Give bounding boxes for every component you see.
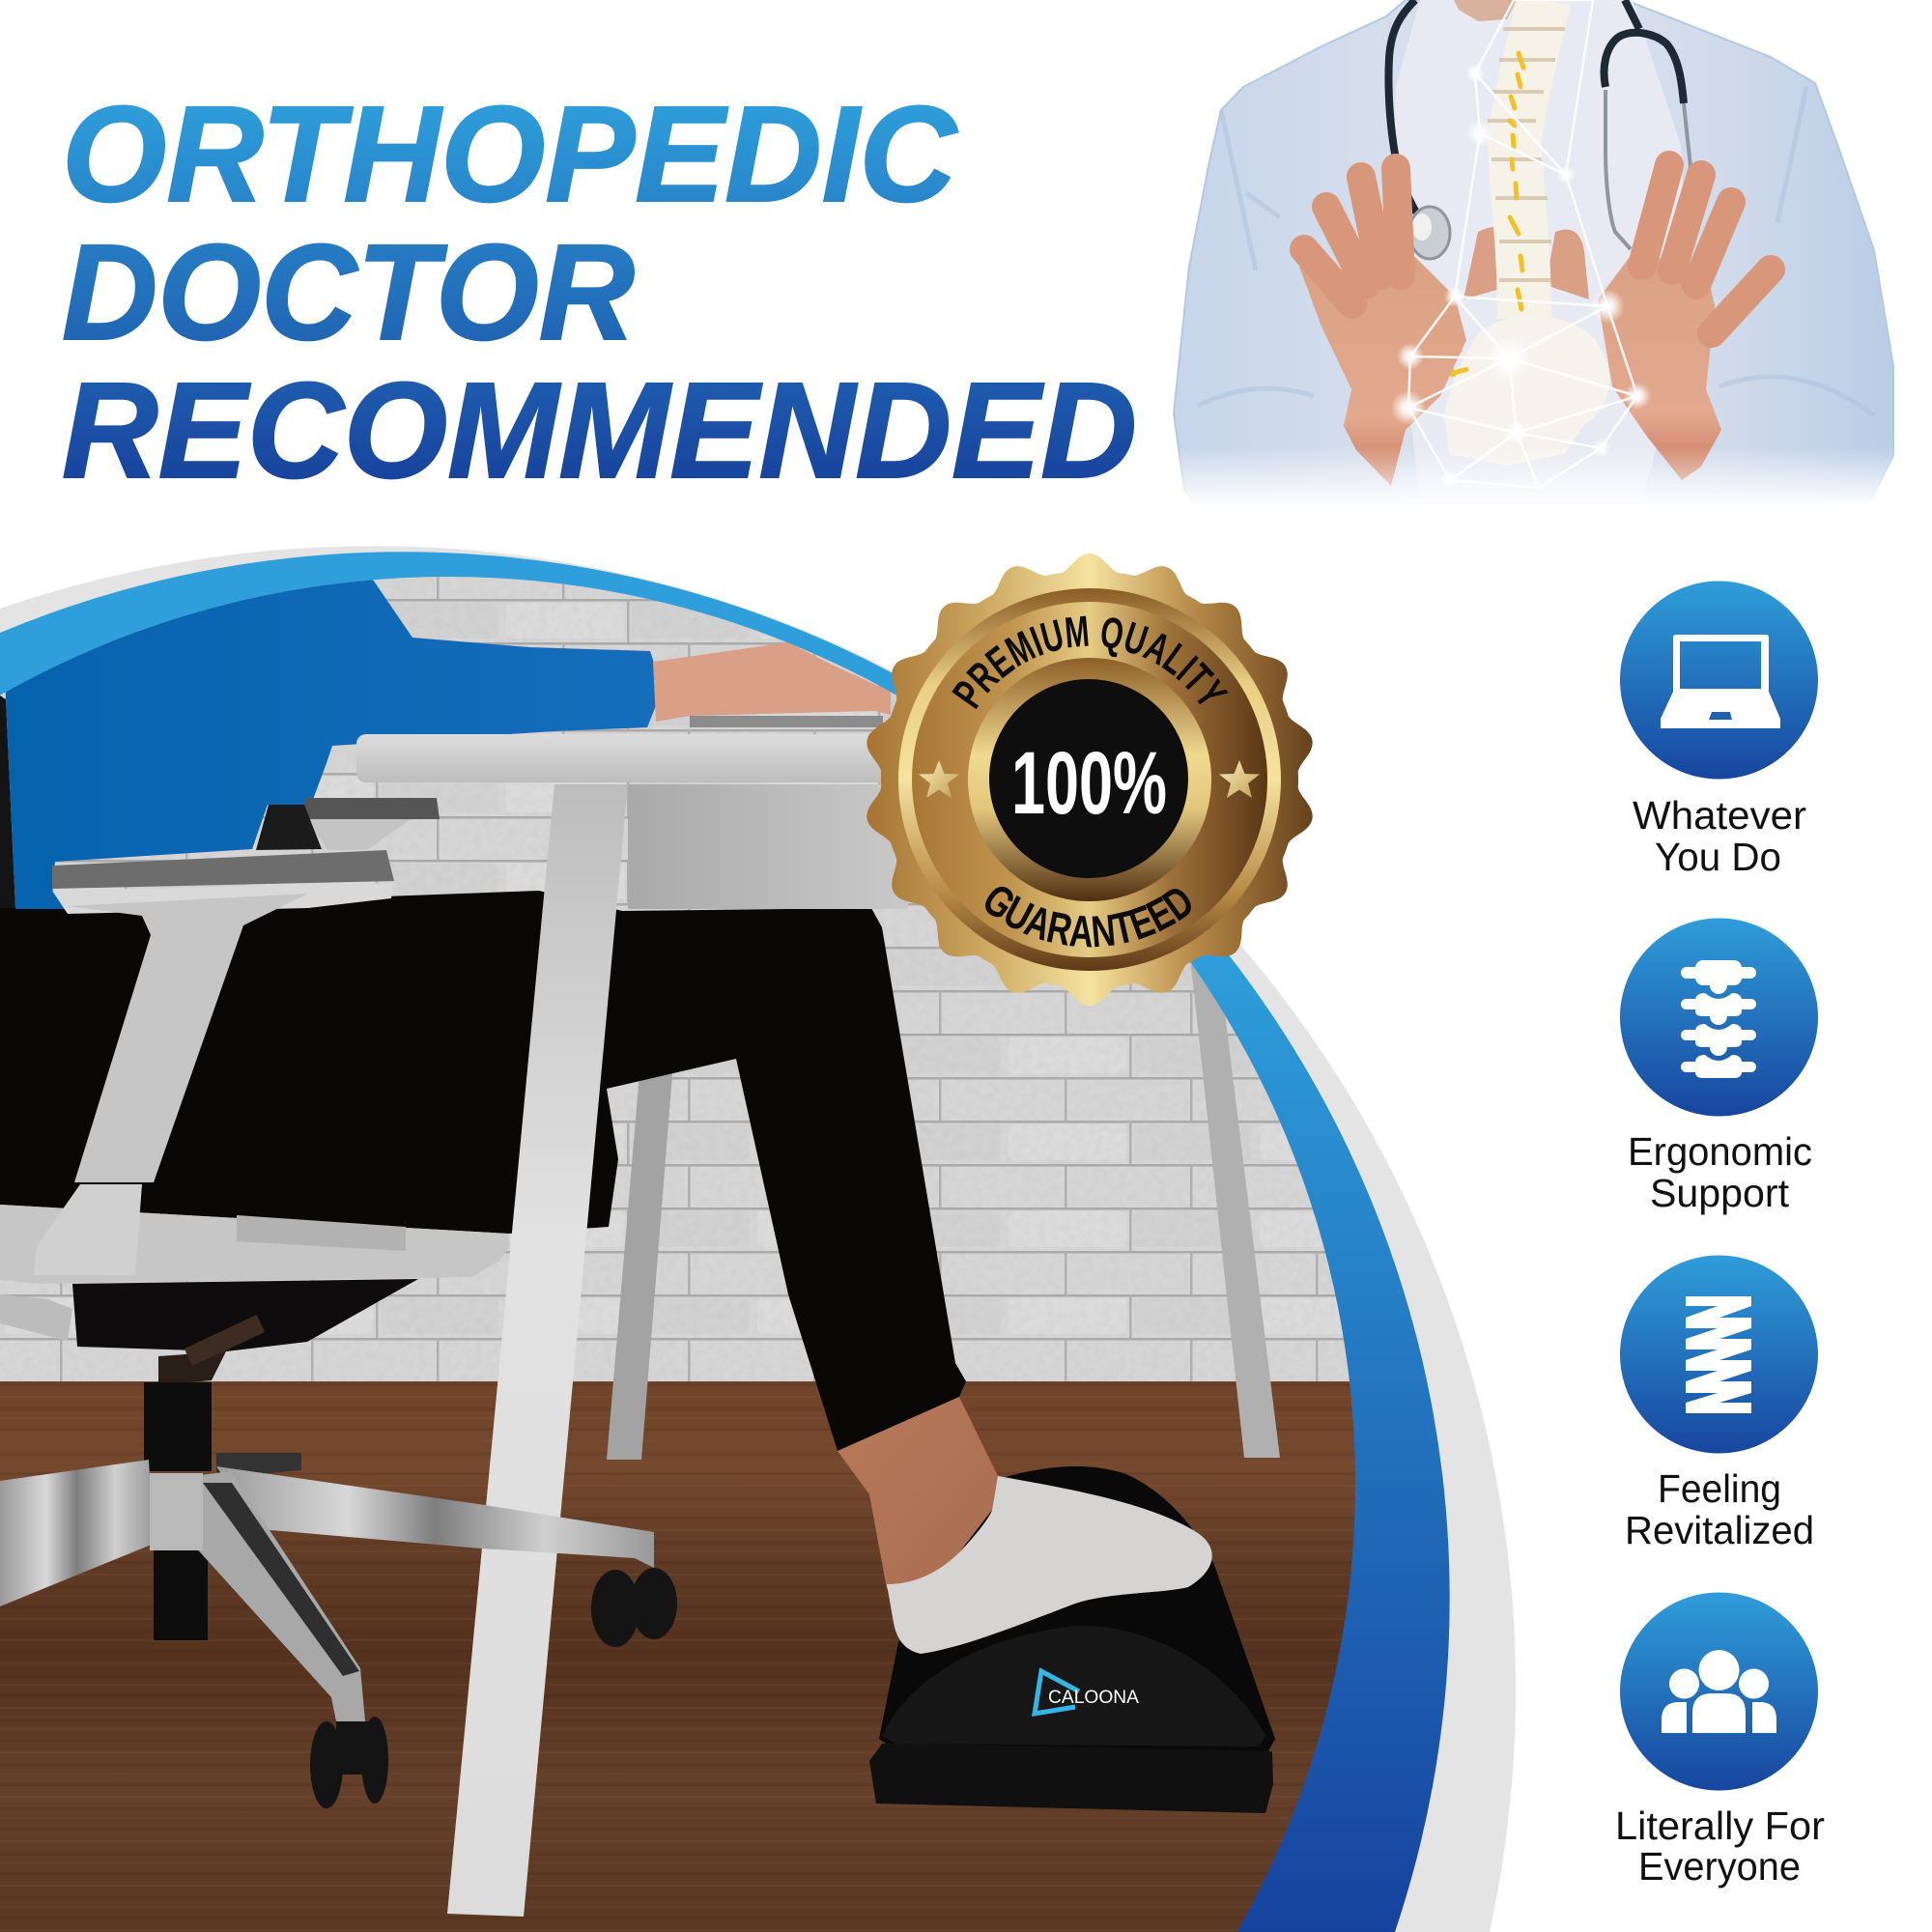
hands behind spine (1463, 226, 1589, 299)
label (1628, 1129, 1812, 1215)
office chair (0, 798, 677, 1808)
feature: whatever you do (1620, 582, 1818, 879)
left seat lever (0, 1294, 72, 1341)
gold badge (867, 554, 1313, 1006)
label: You Do (1655, 835, 1781, 879)
feature: feeling revitalized (1620, 1256, 1818, 1552)
label (1615, 1804, 1825, 1889)
brand logo: CALOONA (1048, 1688, 1139, 1708)
coat folds (1198, 87, 1874, 415)
title: DOCTOR (62, 215, 635, 368)
gas lift (144, 1323, 261, 1640)
doctor illustration with spine (1159, 0, 1913, 506)
left star (919, 760, 959, 798)
grey outer arc (0, 546, 1516, 1932)
ankle (838, 1397, 998, 1589)
inner ring (968, 658, 1211, 901)
label: Support (1650, 1171, 1790, 1215)
dish (898, 588, 1281, 971)
inner dish (912, 602, 1267, 957)
black centre (989, 679, 1188, 878)
label: Whatever (1633, 793, 1806, 838)
seal (858, 548, 1321, 1011)
seat mechanism (72, 1279, 418, 1351)
icon: people (1620, 1592, 1818, 1791)
armrest post (68, 894, 308, 1182)
label: Ergonomic (1628, 1129, 1812, 1174)
sock (887, 1476, 1212, 1654)
guaranteed arc text: GUARANTEED (985, 887, 1191, 947)
feature: ergonomic support (1620, 918, 1818, 1215)
doctor coat (1174, 0, 1893, 503)
shirt and lapels (1391, 0, 1686, 502)
casters (310, 1568, 677, 1808)
legs and seat cushion (0, 891, 966, 1451)
foot rest (869, 1466, 1275, 1813)
neck and collar (1454, 0, 1517, 21)
label: Everyone (1638, 1844, 1801, 1889)
label: Literally For (1615, 1804, 1825, 1848)
icon: laptop (1620, 582, 1818, 779)
seat label strip (237, 1215, 406, 1251)
blue arc (0, 552, 1450, 1932)
wood floor (0, 1381, 1372, 1932)
hand (653, 642, 891, 722)
laptop (690, 716, 883, 727)
blue shirt (6, 580, 655, 909)
title: ORTHOPEDIC (62, 77, 958, 230)
premium quality arc text: PREMIUM QUALITY (952, 616, 1229, 709)
label (1633, 793, 1806, 879)
desk (356, 734, 908, 1917)
spine model (1439, 0, 1609, 466)
label (1625, 1466, 1814, 1552)
seat pan (0, 1205, 510, 1284)
stethoscope (1388, 0, 1691, 259)
feature: literally for everyone (1615, 1592, 1825, 1889)
right star (1219, 760, 1260, 798)
left hand (1299, 168, 1466, 486)
front armrest (52, 850, 394, 914)
back desk legs (607, 956, 1280, 1460)
back armrest (256, 798, 440, 850)
label: Feeling (1658, 1466, 1781, 1511)
icon: spine (1620, 918, 1818, 1117)
brick wall (0, 541, 1372, 1381)
label: Revitalized (1625, 1508, 1814, 1552)
network overlay (1391, 0, 1651, 490)
title: RECOMMENDED (62, 354, 1137, 506)
photo: person at desk with foot rest (0, 522, 1372, 1932)
chrome base (0, 1453, 654, 1721)
right hand (1598, 165, 1771, 480)
brand logo (1035, 1671, 1139, 1714)
icon: spring (1620, 1256, 1818, 1453)
title (62, 77, 1137, 506)
100 percent: 100% (1011, 734, 1167, 833)
